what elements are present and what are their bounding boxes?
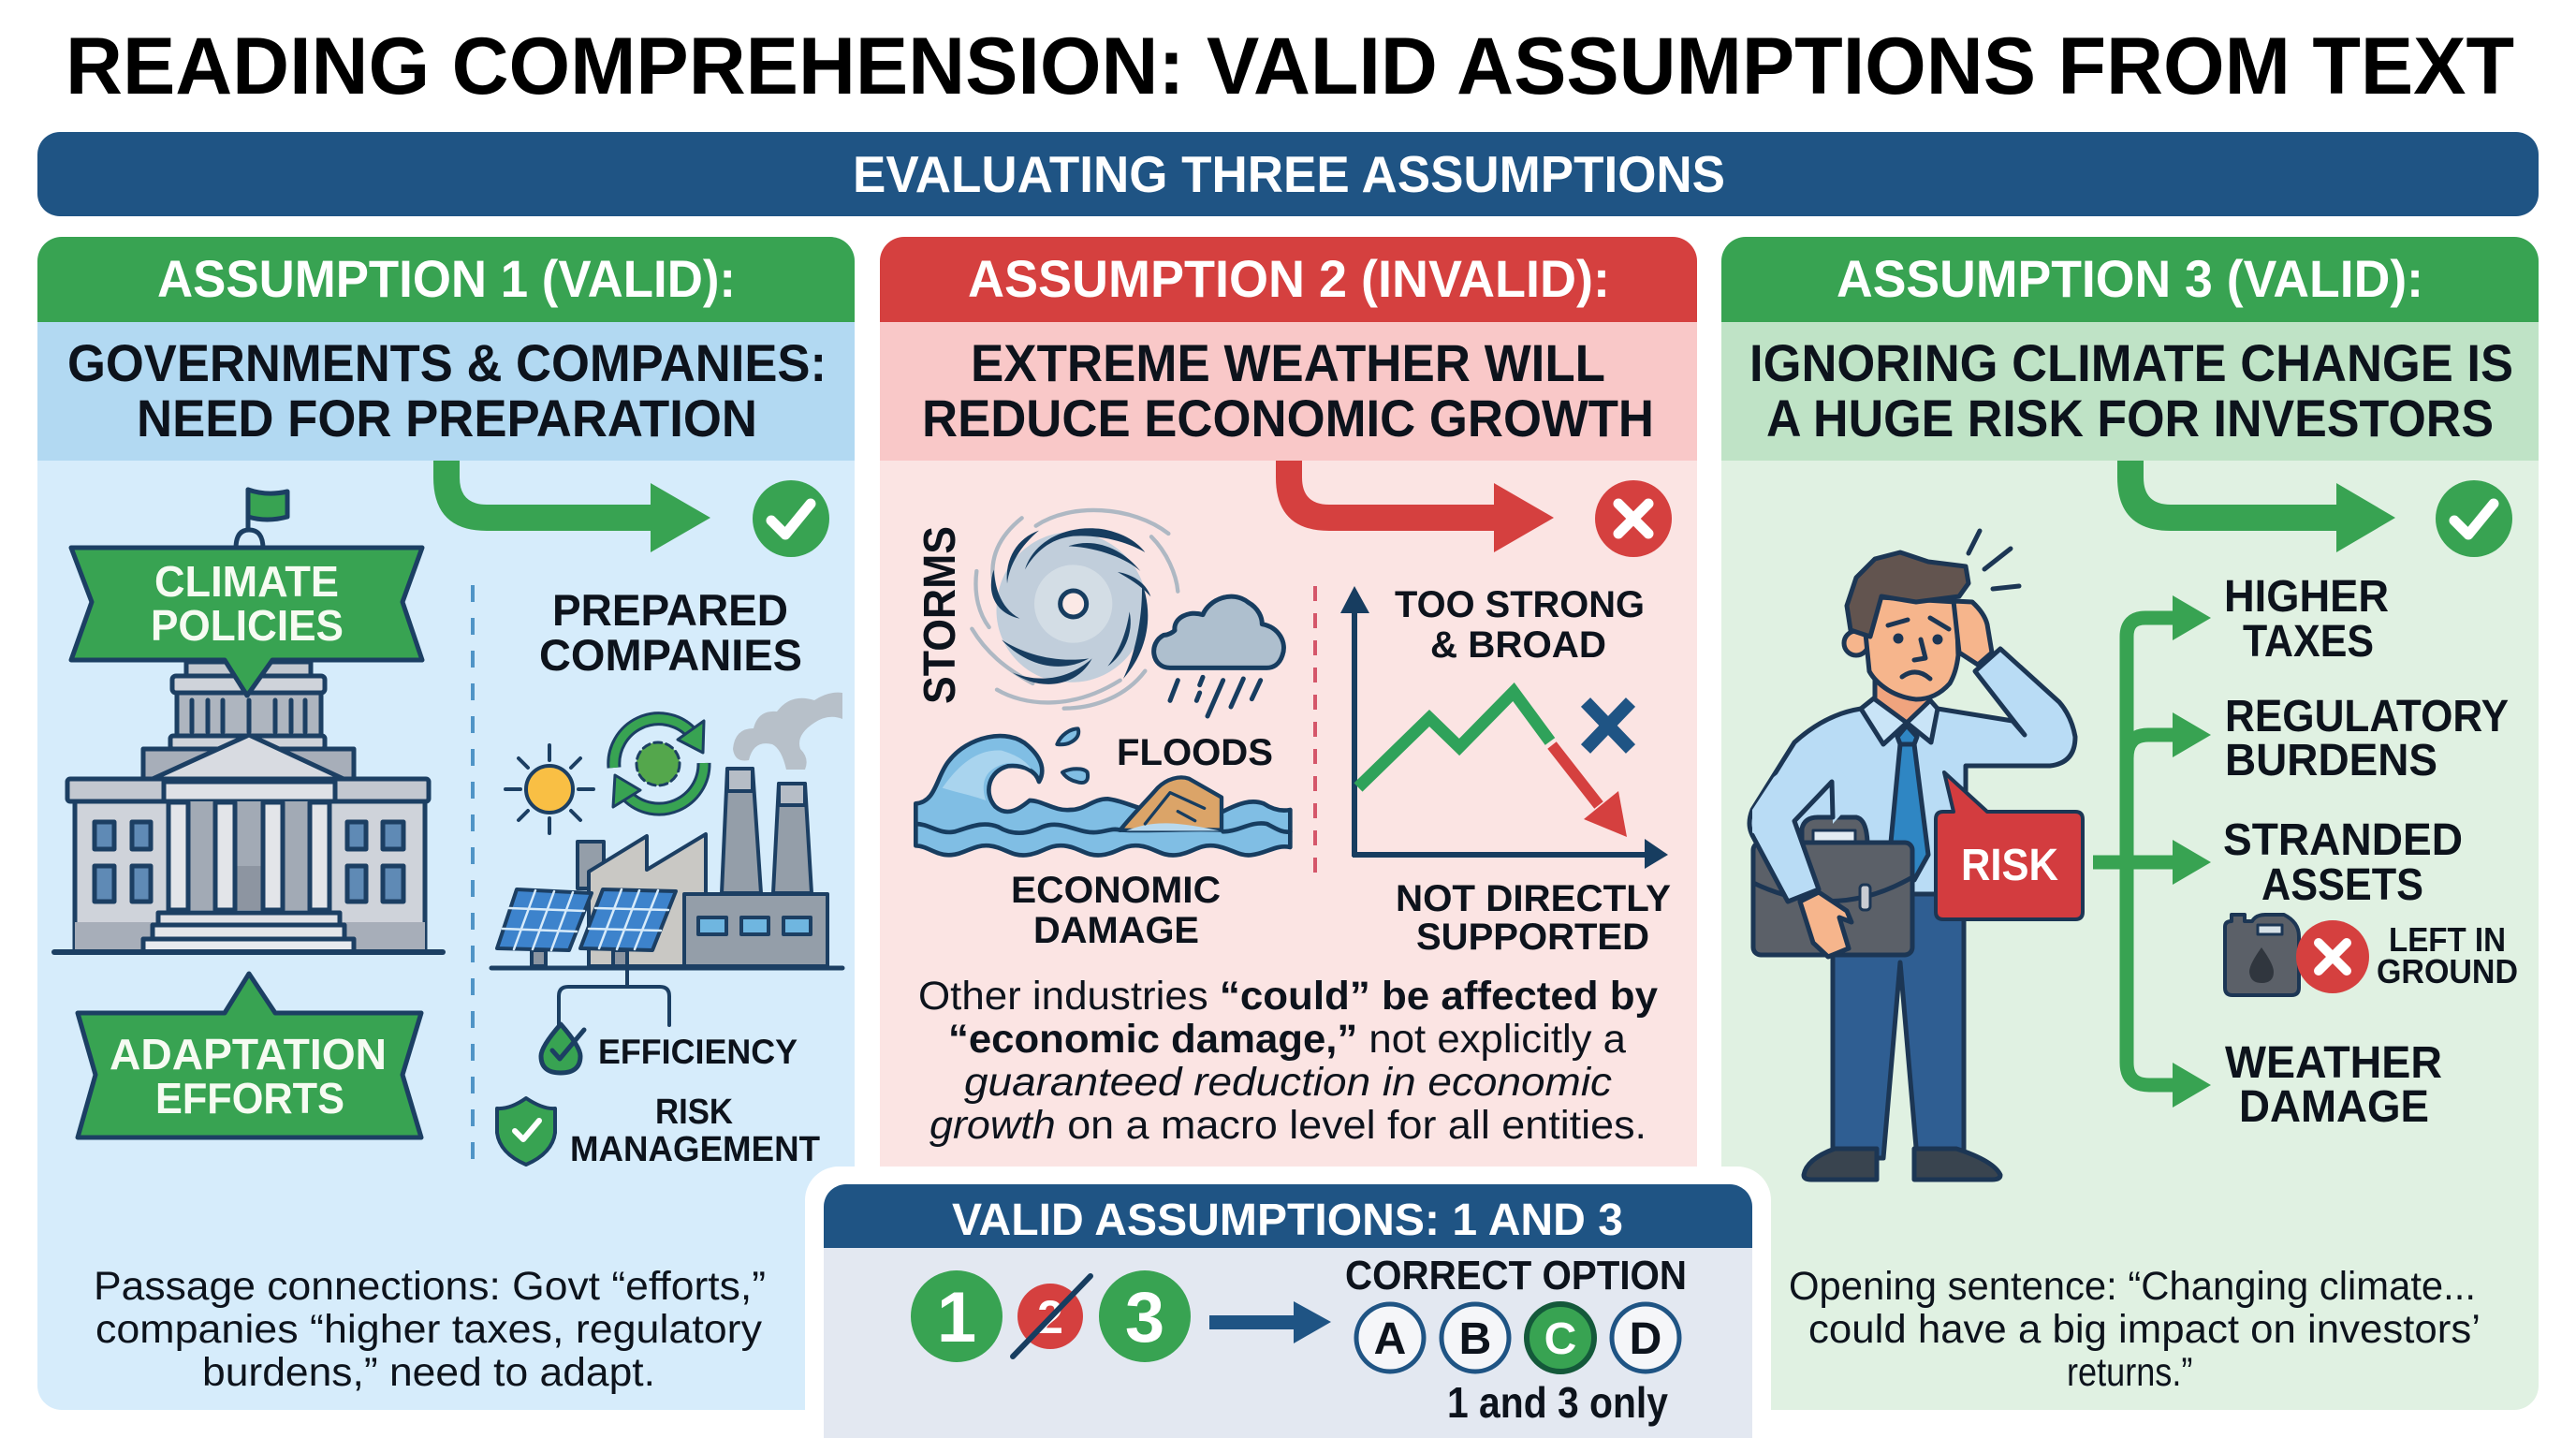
label: economic damage — [1011, 870, 1221, 951]
panel 2 subtitle — [880, 322, 1697, 461]
label: too strong and broad: TOO STRONG — [1395, 584, 1645, 625]
hand on case — [1800, 892, 1852, 957]
label: higher taxes: HIGHER — [2224, 572, 2389, 622]
icon: flood wave — [915, 728, 1290, 856]
panel: assumption 2 — [880, 237, 1697, 1410]
banner: adaptation efforts: EFFORTS — [155, 1074, 344, 1123]
sleeve over case — [1752, 740, 1858, 902]
panel 1 subtitle: NEED FOR PREPARATION — [137, 389, 757, 448]
icon: sun — [505, 745, 593, 833]
label: weather damage: DAMAGE — [2239, 1082, 2429, 1132]
banner: climate policies: CLIMATE — [154, 557, 339, 606]
panel 1 subtitle: GOVERNMENTS & COMPANIES: — [67, 333, 827, 392]
label: not directly supported — [1396, 878, 1671, 958]
text: explanation: growth on a macro level for all entities. — [929, 1103, 1647, 1148]
label: regulatory burdens: REGULATORY — [2225, 692, 2509, 741]
section banner: evaluating three assumptions — [37, 132, 2539, 216]
chart: growth line — [1340, 586, 1668, 869]
badge: assumption 2 crossed out — [1013, 1276, 1090, 1357]
collar — [1861, 697, 1938, 744]
option B — [1442, 1304, 1509, 1372]
text: explanation: Other industries “could” be affected by — [918, 974, 1658, 1019]
option D — [1612, 1304, 1679, 1372]
text: opening sentence: returns.” — [2067, 1350, 2192, 1395]
briefcase — [1802, 817, 1867, 843]
arrow: invalid conclusion — [1276, 461, 1554, 552]
text: passage connections: burdens,” need to adapt. — [202, 1350, 655, 1395]
panel 3 header — [1721, 237, 2539, 322]
label: left in ground: GROUND — [2377, 952, 2518, 990]
banner: climate policies — [71, 548, 422, 696]
panel 2 subtitle: REDUCE ECONOMIC GROWTH — [922, 389, 1654, 448]
panel 3 subtitle: IGNORING CLIMATE CHANGE IS — [1749, 333, 2513, 392]
label: economic damage: DAMAGE — [1033, 910, 1199, 951]
label: left in ground — [2377, 920, 2518, 990]
option B: B — [1459, 1314, 1491, 1364]
text: explanation — [918, 974, 1658, 1148]
illustration: worried businessman — [1749, 531, 2075, 1180]
panel 3 subtitle: A HUGE RISK FOR INVESTORS — [1766, 389, 2494, 448]
option C selected: C — [1544, 1314, 1576, 1364]
label: stranded assets — [2223, 815, 2463, 910]
legs — [1833, 894, 1964, 1158]
panel 1 header — [37, 237, 855, 322]
text: explanation: “economic damage,” not explicitly a — [948, 1017, 1626, 1062]
panel: assumption 1 — [37, 237, 855, 1410]
icon: hurricane — [972, 510, 1178, 709]
callout: risk — [1936, 772, 2083, 919]
title: READING COMPREHENSION: VALID ASSUMPTIONS FROM TEXT — [66, 22, 2514, 111]
icon: smoke — [733, 693, 842, 770]
flow tree: risk consequences — [2093, 595, 2211, 1108]
label: economic damage: ECONOMIC — [1011, 870, 1221, 911]
tie — [1891, 744, 1928, 880]
label: floods: FLOODS — [1117, 732, 1273, 773]
connector: benefits — [559, 970, 669, 1025]
panel 2 subtitle: EXTREME WEATHER WILL — [971, 333, 1605, 392]
label: stranded assets: STRANDED — [2223, 815, 2463, 865]
icon: oil can — [2225, 915, 2299, 995]
text: passage connections — [94, 1264, 766, 1395]
label: prepared companies: PREPARED — [552, 585, 788, 635]
label: weather damage: WEATHER — [2225, 1038, 2442, 1088]
raised hand — [1954, 601, 1992, 665]
label: regulatory burdens: BURDENS — [2225, 736, 2437, 785]
icon: check mark — [753, 480, 829, 557]
shirt — [1749, 649, 2075, 902]
label: risk management: MANAGEMENT — [570, 1130, 820, 1169]
shoes — [1804, 1149, 2000, 1180]
label: higher taxes: TAXES — [2243, 617, 2374, 667]
badge: assumption 3: 3 — [1125, 1278, 1164, 1357]
icon: rain cloud — [1154, 596, 1283, 716]
label: too strong and broad — [1395, 584, 1645, 666]
damaged house — [1120, 777, 1222, 830]
label: regulatory burdens — [2225, 692, 2509, 785]
label: stranded assets: ASSETS — [2261, 860, 2423, 910]
text: opening sentence: Opening sentence: “Changing climate... — [1789, 1264, 2476, 1309]
panel 3 header: ASSUMPTION 3 (VALID): — [1837, 249, 2423, 308]
option C selected — [1527, 1304, 1594, 1372]
neck — [1875, 679, 1930, 723]
conclusion header: VALID ASSUMPTIONS: 1 AND 3 — [952, 1196, 1623, 1245]
icon: recycling — [613, 719, 704, 809]
text: opening sentence — [1789, 1264, 2481, 1395]
banner: adaptation efforts: ADAPTATION — [110, 1030, 387, 1078]
label: prepared companies: COMPANIES — [539, 630, 802, 680]
label: correct option: CORRECT OPTION — [1345, 1253, 1687, 1299]
text: explanation: guaranteed reduction in economic — [964, 1060, 1613, 1105]
arrow: to correct option — [1209, 1301, 1331, 1343]
badge: assumption 1 — [911, 1270, 1003, 1362]
head — [1844, 631, 1868, 655]
icon: risk shield — [497, 1098, 555, 1165]
label: storms: STORMS — [915, 526, 965, 704]
label: not directly supported: SUPPORTED — [1416, 917, 1649, 958]
label: prepared companies — [539, 585, 802, 680]
stress marks — [1969, 531, 2019, 589]
label: not directly supported: NOT DIRECTLY — [1396, 878, 1671, 919]
text: opening sentence: could have a big impact on investors’ — [1808, 1307, 2481, 1352]
label: risk management — [570, 1093, 820, 1169]
label: higher taxes — [2224, 572, 2389, 667]
section banner: evaluating three assumptions: EVALUATING THREE ASSUMPTIONS — [853, 145, 1725, 203]
label: risk management: RISK — [655, 1093, 734, 1132]
panel 2 header: ASSUMPTION 2 (INVALID): — [968, 249, 1610, 308]
badge: assumption 1: 1 — [937, 1278, 976, 1357]
icon: factory with solar panels — [491, 769, 842, 968]
icon: government building — [54, 490, 443, 952]
banner: adaptation efforts — [78, 974, 421, 1137]
panel 1 header: ASSUMPTION 1 (VALID): — [157, 249, 736, 308]
conclusion header — [824, 1184, 1752, 1248]
label: weather damage — [2225, 1038, 2442, 1132]
arrow: valid conclusion — [433, 461, 710, 552]
icon: check mark — [2436, 480, 2512, 557]
badge: assumption 2 crossed out: 2 — [1037, 1291, 1063, 1343]
panel 1 subtitle — [37, 322, 855, 461]
text: passage connections: Passage connections: Govt “efforts,” — [94, 1264, 766, 1309]
label: 1 and 3 only: 1 and 3 only — [1447, 1378, 1668, 1427]
option D: D — [1630, 1314, 1661, 1364]
option A — [1356, 1304, 1424, 1372]
label: efficiency: EFFICIENCY — [598, 1033, 798, 1071]
icon: efficiency drop — [541, 1024, 580, 1073]
banner: climate policies: POLICIES — [151, 601, 344, 650]
icon: blocked — [2296, 920, 2369, 993]
panel: assumption 3 — [1721, 237, 2539, 1410]
callout: risk: RISK — [1961, 841, 2058, 890]
badge: assumption 3 — [1099, 1270, 1191, 1362]
arrow: valid conclusion — [2117, 461, 2395, 552]
panel 3 subtitle — [1721, 322, 2539, 461]
label: left in ground: LEFT IN — [2389, 920, 2506, 959]
text: passage connections: companies “higher taxes, regulatory — [95, 1307, 763, 1352]
label: too strong and broad: & BROAD — [1430, 624, 1606, 666]
panel: conclusion — [805, 1167, 1771, 1438]
panel 2 header — [880, 237, 1697, 322]
icon: cross mark — [1595, 480, 1672, 557]
option A: A — [1374, 1314, 1406, 1364]
